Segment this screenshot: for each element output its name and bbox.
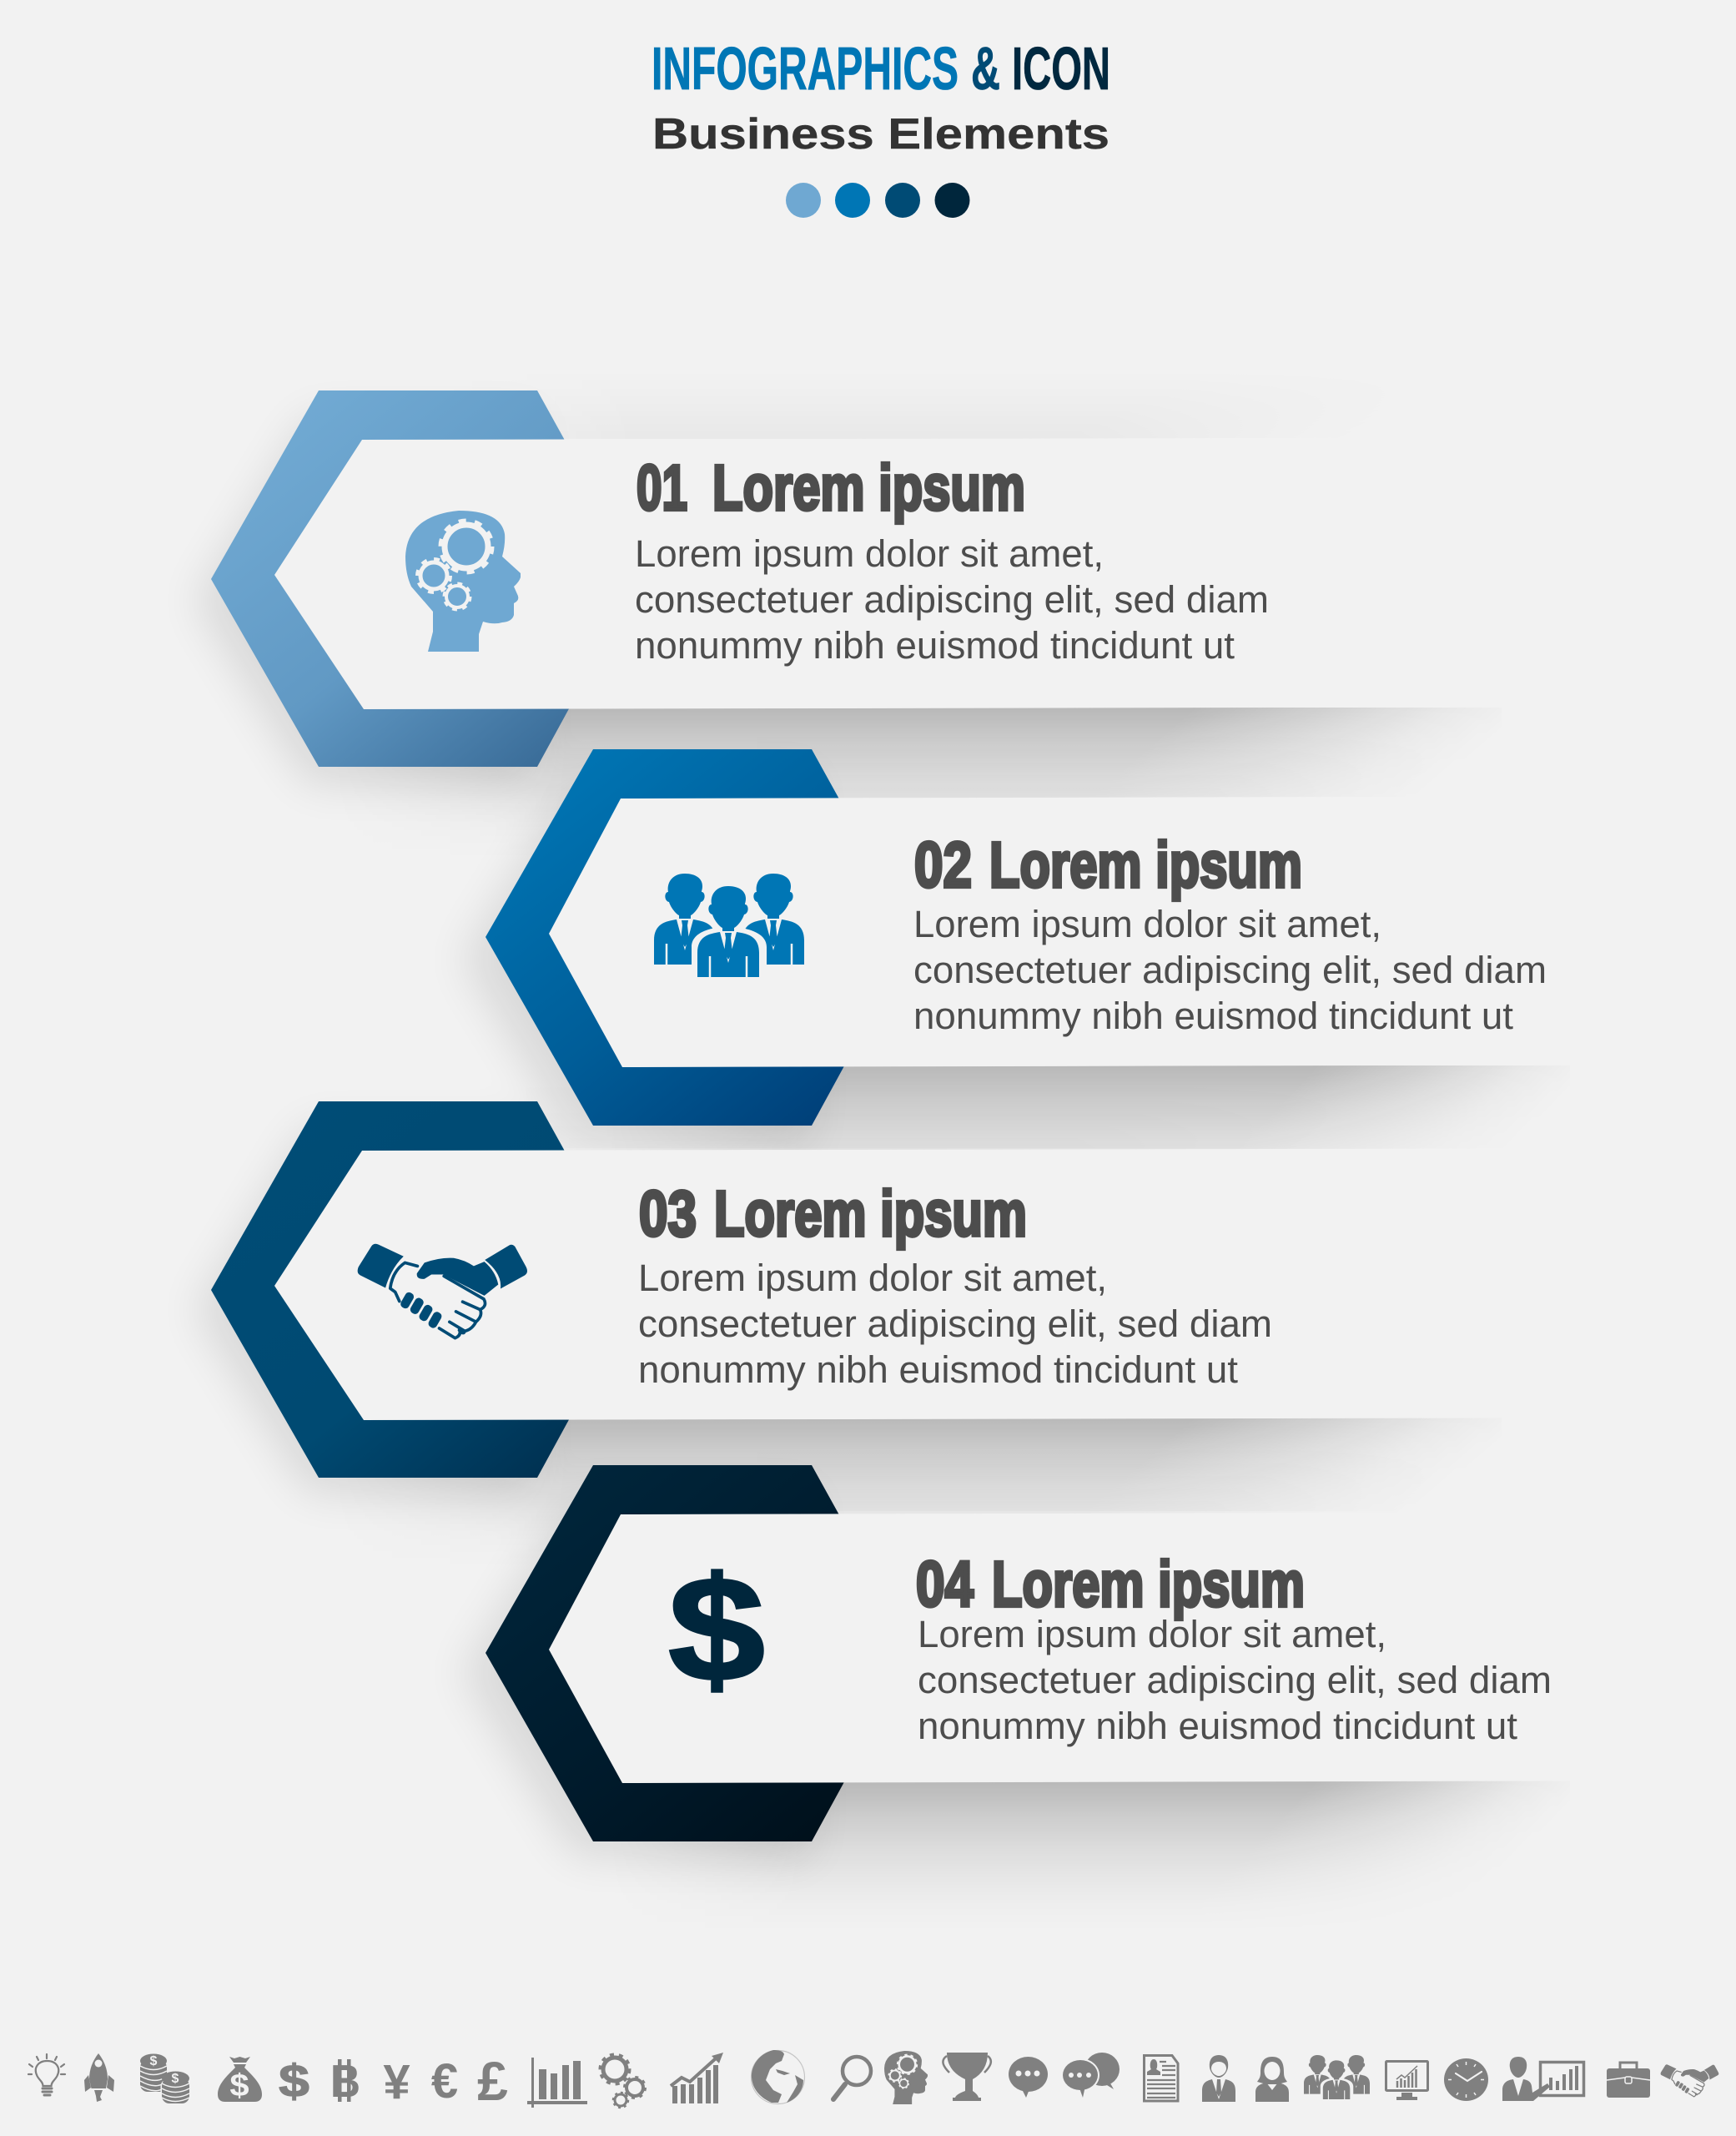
panel: 02 bbox=[486, 749, 1736, 1126]
hexagon 04 bbox=[486, 1465, 915, 1841]
panel: 04 bbox=[486, 1465, 1736, 1841]
hexagon 01 bbox=[211, 390, 641, 767]
body text 01: Lorem ipsum dolor sit amet, bbox=[635, 532, 1104, 575]
subtitle: Business Elements: Business Elements bbox=[652, 110, 1110, 159]
icon: coin stacks bbox=[140, 2054, 190, 2104]
card 03 bbox=[274, 1148, 1736, 1420]
icon row bbox=[28, 2050, 1718, 2112]
heading 01: 01 bbox=[637, 452, 687, 524]
heading 02: Lorem ipsum bbox=[989, 829, 1302, 901]
icon: briefcase bbox=[1607, 2063, 1650, 2098]
body text 04: Lorem ipsum dolor sit amet, bbox=[918, 1613, 1386, 1655]
body text 02: nonummy nibh euismod tincidunt ut bbox=[913, 995, 1513, 1037]
body text 02 bbox=[913, 903, 1547, 1037]
icon: trophy bbox=[943, 2053, 991, 2101]
title: Infographics and Icon: INFOGRAPHICS bbox=[652, 36, 959, 103]
body text 03: Lorem ipsum dolor sit amet, bbox=[638, 1257, 1107, 1299]
heading 01: Lorem ipsum bbox=[712, 452, 1025, 524]
icon: rocket bbox=[84, 2053, 114, 2102]
hexagon 02 bbox=[486, 749, 915, 1126]
icon: coin stacks: $ bbox=[172, 2072, 179, 2086]
body text 03: nonummy nibh euismod tincidunt ut bbox=[638, 1348, 1238, 1391]
icon: coin stacks: $ bbox=[150, 2054, 158, 2068]
currency: euro: € bbox=[431, 2054, 458, 2108]
currency: yen: ¥ bbox=[383, 2055, 410, 2109]
icon: team of three people bbox=[654, 874, 804, 977]
body text 04: nonummy nibh euismod tincidunt ut bbox=[918, 1705, 1517, 1747]
icon: clock bbox=[1444, 2058, 1488, 2101]
heading 04 bbox=[916, 1549, 1305, 1620]
heading 04: Lorem ipsum bbox=[992, 1549, 1305, 1620]
icon: monitor with chart bbox=[1386, 2061, 1428, 2100]
icon: dollar sign: $ bbox=[668, 1547, 765, 1713]
icon: gears bbox=[601, 2054, 646, 2108]
icon: resume document bbox=[1145, 2056, 1178, 2101]
icon: businesswoman bbox=[1255, 2057, 1289, 2102]
body text 02: consectetuer adipiscing elit, sed diam bbox=[913, 949, 1547, 991]
body text 04 bbox=[918, 1613, 1552, 1747]
icon: small handshake bbox=[1661, 2064, 1718, 2097]
body text 01 bbox=[635, 532, 1269, 667]
body text 03: consectetuer adipiscing elit, sed diam bbox=[638, 1302, 1272, 1345]
heading 03: Lorem ipsum bbox=[714, 1178, 1027, 1250]
card 02 bbox=[549, 796, 1736, 1067]
icon: head with gears bbox=[405, 511, 521, 652]
icon: money bag: $ bbox=[229, 2068, 249, 2103]
hexagon 03 bbox=[211, 1101, 641, 1478]
body text 03 bbox=[638, 1257, 1272, 1391]
title: Infographics and Icon: & bbox=[971, 36, 1000, 103]
currency: dollar: $ bbox=[279, 2055, 309, 2107]
icon: small head with gears bbox=[884, 2051, 928, 2104]
body text 01: consectetuer adipiscing elit, sed diam bbox=[635, 578, 1269, 621]
heading 03: 03 bbox=[639, 1178, 697, 1250]
body text 01: nonummy nibh euismod tincidunt ut bbox=[635, 624, 1235, 667]
icon: handshake bbox=[358, 1244, 527, 1338]
body text 02: Lorem ipsum dolor sit amet, bbox=[913, 903, 1381, 945]
icon: presenter with chart board bbox=[1502, 2057, 1583, 2101]
icon: speech bubble bbox=[1009, 2057, 1048, 2098]
panel: 03 bbox=[211, 1101, 1736, 1478]
icon: small team bbox=[1304, 2055, 1370, 2099]
heading 01 bbox=[637, 452, 1025, 524]
icon: two speech bubbles bbox=[1061, 2053, 1120, 2098]
card 04 bbox=[549, 1512, 1736, 1783]
heading 04: 04 bbox=[916, 1549, 974, 1620]
body text 04: consectetuer adipiscing elit, sed diam bbox=[918, 1659, 1552, 1701]
card 01 bbox=[274, 437, 1736, 709]
icon: businessman bbox=[1202, 2055, 1235, 2102]
title: Infographics and Icon: ICON bbox=[1012, 36, 1110, 103]
colour dots bbox=[786, 183, 969, 218]
panel: 01 bbox=[211, 390, 1736, 767]
icon: light bulb bbox=[28, 2054, 65, 2095]
currency: bitcoin: B bbox=[330, 2055, 360, 2107]
icon: bar chart bbox=[527, 2058, 587, 2108]
heading 03 bbox=[639, 1178, 1027, 1250]
heading 02: 02 bbox=[914, 829, 972, 901]
icon: globe bbox=[751, 2050, 804, 2104]
icon: magnifier bbox=[833, 2057, 871, 2099]
heading 02 bbox=[914, 829, 1302, 901]
icon: money bag bbox=[218, 2057, 262, 2103]
panel shadows bbox=[196, 367, 1570, 1932]
icon: growth chart bbox=[671, 2053, 723, 2103]
currency: pound: £ bbox=[477, 2050, 508, 2112]
